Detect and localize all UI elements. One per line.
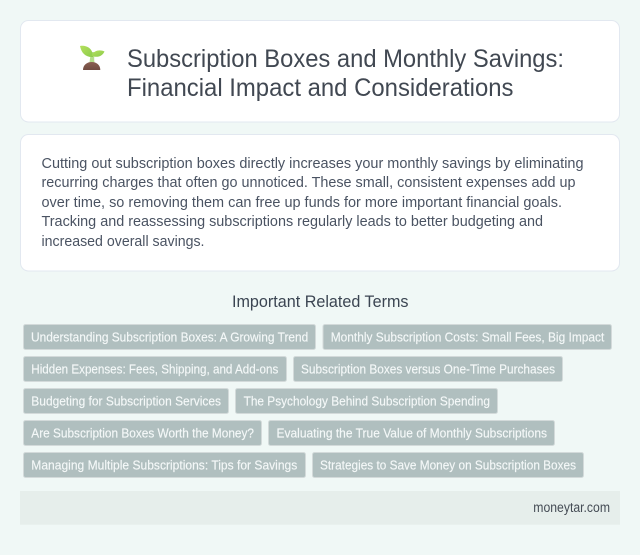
text block: summary <box>42 155 584 250</box>
tag <box>24 420 262 446</box>
tag: Budgeting for Subscription Services <box>31 394 221 408</box>
text block: summary: over time, so removing them can free up funds for more important financial goals. <box>42 194 562 211</box>
tag <box>312 452 584 478</box>
tag <box>24 356 286 382</box>
tag <box>24 388 228 414</box>
tag <box>24 452 306 478</box>
panel: summary paragraph <box>20 134 620 271</box>
tag: Managing Multiple Subscriptions: Tips for Savings <box>31 458 298 472</box>
tag: Hidden Expenses: Fees, Shipping, and Add-ons <box>31 362 279 376</box>
footer <box>20 491 620 525</box>
tag <box>323 324 612 350</box>
text block: summary: recurring charges that often go unnoticed. These small, consistent expenses add up <box>42 174 576 191</box>
tag: Subscription Boxes versus One-Time Purchases <box>301 362 555 376</box>
tag: Are Subscription Boxes Worth the Money? <box>31 426 254 440</box>
tag: Strategies to Save Money on Subscription Boxes <box>320 458 576 472</box>
icon: sprout <box>80 46 104 70</box>
tag list <box>24 324 612 478</box>
tag: Monthly Subscription Costs: Small Fees, Big Impact <box>331 330 605 344</box>
tag <box>236 388 498 414</box>
heading: related terms: Important Related Terms <box>232 292 408 311</box>
text block: summary: Cutting out subscription boxes directly increases your monthly savings by eliminating <box>42 155 584 172</box>
tag <box>268 420 554 446</box>
text block: summary: increased overall savings. <box>42 233 204 250</box>
tag: The Psychology Behind Subscription Spending <box>244 394 490 408</box>
text block: summary: Tracking and reassessing subscriptions regularly leads to better budgeting and <box>42 213 543 230</box>
footer source text: moneytar.com <box>533 500 610 515</box>
tag: Understanding Subscription Boxes: A Growing Trend <box>31 330 308 344</box>
tag <box>294 356 562 382</box>
title: Subscription Boxes and Monthly Savings: <box>127 45 564 73</box>
tag: Evaluating the True Value of Monthly Subscriptions <box>276 426 547 440</box>
title <box>127 45 564 102</box>
tag <box>24 324 316 350</box>
panel: header <box>20 20 620 122</box>
title: Financial Impact and Considerations <box>127 74 514 102</box>
